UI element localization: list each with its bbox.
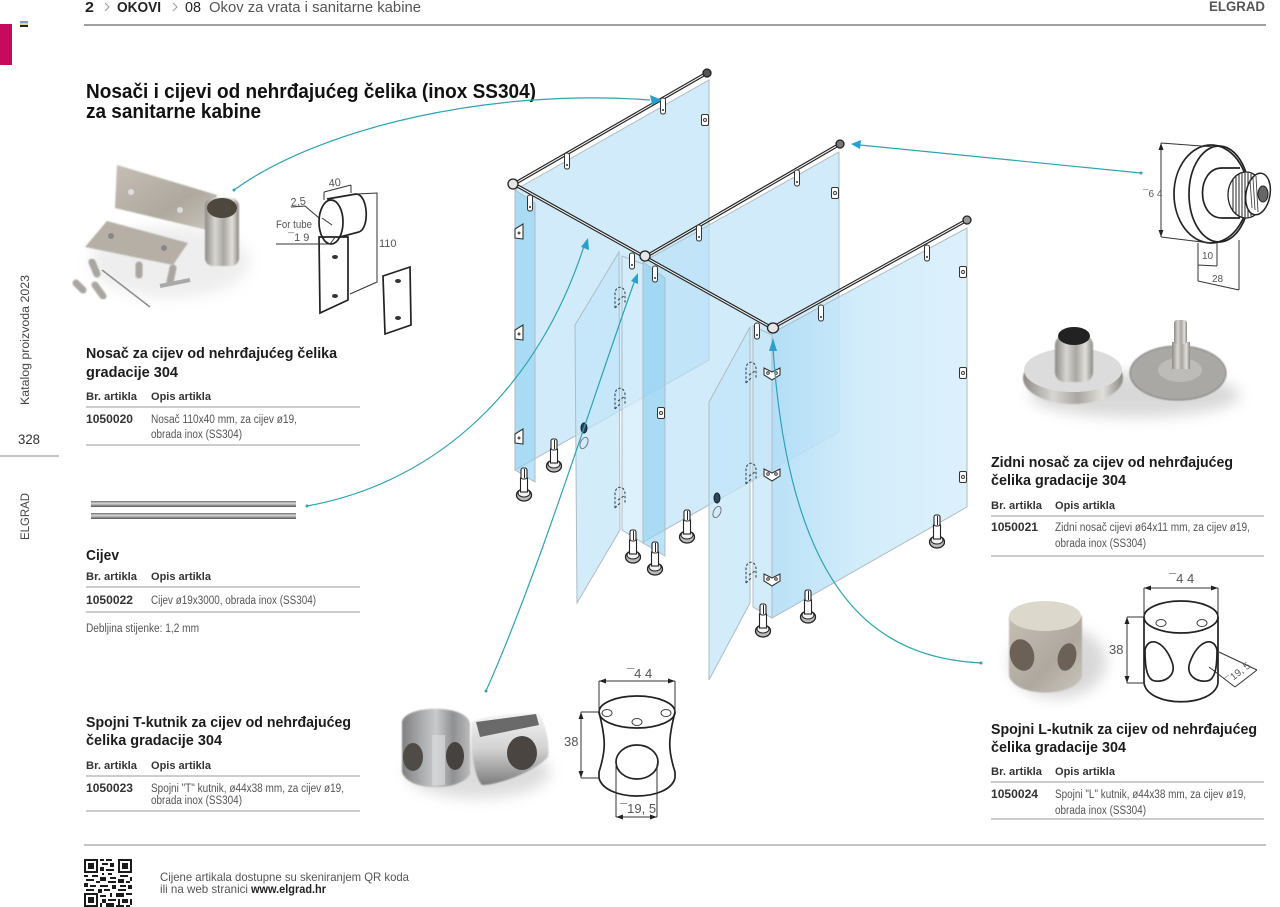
product 1050024 heading: Spojni L-kutnik za cijev od nehrđajućeg — [991, 721, 1257, 738]
product 1050021 table: Br. artikla — [991, 500, 1043, 512]
dimension labels: ¯6 4 — [1142, 188, 1163, 200]
side label: catalog: Katalog proizvoda 2023 — [20, 275, 32, 405]
product 1050023 heading — [86, 714, 351, 749]
arrow: tube — [306, 238, 589, 508]
product 1050020 table — [86, 391, 360, 445]
accent tab — [0, 24, 12, 65]
dimension labels: 110 — [379, 238, 397, 250]
product 1050023 photo — [402, 709, 550, 798]
product 1050023 heading: Spojni T-kutnik za cijev od nehrđajućeg — [86, 714, 351, 731]
title: Nosači i cijevi od nehrđajućeg čelika (inox SS304) — [86, 81, 536, 103]
product 1050022 photo: tubes — [91, 501, 296, 519]
product 1050024 heading — [991, 721, 1257, 756]
product 1050024 technical drawing — [1109, 571, 1257, 702]
corner fittings — [508, 69, 971, 333]
product 1050021 heading: Zidni nosač za cijev od nehrđajućeg — [991, 454, 1233, 471]
footer note: ili na web stranici — [160, 882, 248, 896]
product 1050024 heading: čelika gradacije 304 — [991, 739, 1127, 756]
product 1050024 table: obrada inox (SS304) — [1055, 805, 1146, 817]
product 1050020 table: Nosač 110x40 mm, za cijev ø19, — [151, 414, 297, 426]
wall clips — [515, 114, 966, 586]
product 1050023 table — [86, 760, 360, 811]
product 1050021 table: Opis artikla — [1055, 500, 1116, 512]
product 1050020 heading: Nosač za cijev od nehrđajućeg čelika — [86, 345, 338, 362]
footer note: www.elgrad.hr — [250, 882, 326, 896]
product 1050024 table: 1050024 — [991, 789, 1039, 801]
product 1050023 table: 1050023 — [86, 783, 133, 795]
breadcrumb header: OKOVI — [117, 0, 161, 16]
breadcrumb header: Okov za vrata i sanitarne kabine — [209, 0, 421, 16]
arrow: T connector — [484, 273, 638, 692]
support feet — [516, 439, 944, 637]
dimension labels: 10 — [1202, 251, 1214, 262]
footer note — [160, 870, 409, 896]
dimension labels — [564, 666, 656, 816]
hangers — [528, 98, 930, 339]
product 1050023 table: Opis artikla — [151, 760, 212, 772]
product 1050021 technical drawing — [1142, 143, 1273, 290]
dimension labels — [1142, 188, 1224, 285]
product 1050024 table — [991, 766, 1264, 819]
arrow: L connector — [769, 338, 982, 664]
dimension labels: ¯4 4 — [626, 666, 652, 681]
product 1050021 heading: čelika gradacije 304 — [991, 472, 1127, 489]
product 1050023 table: Spojni "T" kutnik, ø44x38 mm, za cijev ø19, — [151, 783, 344, 795]
product 1050022 table: 1050022 — [86, 595, 133, 607]
dimension labels: ¯19, 5 — [1223, 660, 1253, 687]
dimension labels — [276, 177, 397, 250]
product 1050023 technical drawing — [564, 666, 675, 820]
dimension labels: 28 — [1212, 274, 1224, 285]
product 1050020 table: obrada inox (SS304) — [151, 429, 242, 441]
product 1050020 heading — [86, 345, 338, 381]
product 1050021 table: Zidni nosač cijevi ø64x11 mm, za cijev ø19, — [1055, 522, 1250, 534]
dimension labels: For tube — [276, 219, 312, 231]
product 1050024 table: Opis artikla — [1055, 766, 1116, 778]
breadcrumb header — [85, 0, 421, 16]
product 1050023 table: Br. artikla — [86, 760, 138, 772]
product 1050020 technical drawing — [276, 177, 411, 334]
door handles — [578, 423, 723, 519]
product 1050020 photo — [76, 165, 250, 307]
product 1050021 table: 1050021 — [991, 522, 1039, 534]
product 1050021 photo — [1023, 320, 1240, 417]
dimension labels: ¯19, 5 — [619, 801, 656, 816]
product 1050022 table — [86, 571, 360, 612]
dimension labels: 38 — [1109, 642, 1123, 657]
side label: brand: ELGRAD — [20, 493, 32, 540]
product 1050022 table: Br. artikla — [86, 571, 138, 583]
product 1050024 photo — [1006, 601, 1106, 698]
dimension labels: ¯1 9 — [287, 232, 309, 244]
product 1050022 table: Opis artikla — [151, 571, 212, 583]
product 1050024 table: Br. artikla — [991, 766, 1043, 778]
page number: 328 — [18, 431, 40, 447]
product 1050022 heading: Cijev — [86, 547, 120, 564]
dimension labels — [1109, 571, 1253, 687]
product 1050023 table: obrada inox (SS304) — [151, 795, 242, 807]
dimension labels: ¯4 4 — [1168, 571, 1194, 586]
product 1050024 table: Spojni "L" kutnik, ø44x38 mm, za cijev ø19, — [1055, 789, 1246, 801]
product 1050021 heading — [991, 454, 1233, 489]
product 1050021 table — [991, 500, 1264, 556]
dimension labels: 2,5 — [290, 195, 307, 209]
product 1050022 table: Cijev ø19x3000, obrada inox (SS304) — [151, 595, 316, 607]
hidden hinges — [615, 287, 756, 583]
isometric cabin diagram — [508, 69, 971, 680]
arrow: top rail bracket — [232, 95, 662, 192]
product 1050020 heading: gradacije 304 — [86, 364, 179, 381]
breadcrumb header: 08 — [185, 0, 201, 16]
product 1050020 table: Opis artikla — [151, 391, 212, 403]
product 1050020 table: Br. artikla — [86, 391, 138, 403]
icon: small stripes — [20, 21, 28, 27]
title: za sanitarne kabine — [86, 101, 261, 123]
QR code — [84, 859, 132, 907]
arrow: wall mount — [851, 140, 1142, 174]
dimension labels: 38 — [564, 734, 578, 749]
footer note: Cijene artikala dostupne su skeniranjem QR koda — [160, 870, 409, 884]
dimension labels: 40 — [328, 177, 341, 190]
product 1050020 table: 1050020 — [86, 414, 133, 426]
product 1050021 table: obrada inox (SS304) — [1055, 538, 1146, 550]
wall thickness note: Debljina stijenke: 1,2 mm — [86, 623, 199, 635]
product 1050023 heading: čelika gradacije 304 — [86, 732, 223, 749]
rails — [514, 73, 967, 328]
glass panels — [515, 80, 967, 680]
title — [86, 81, 536, 123]
breadcrumb header: 2 — [85, 0, 94, 16]
